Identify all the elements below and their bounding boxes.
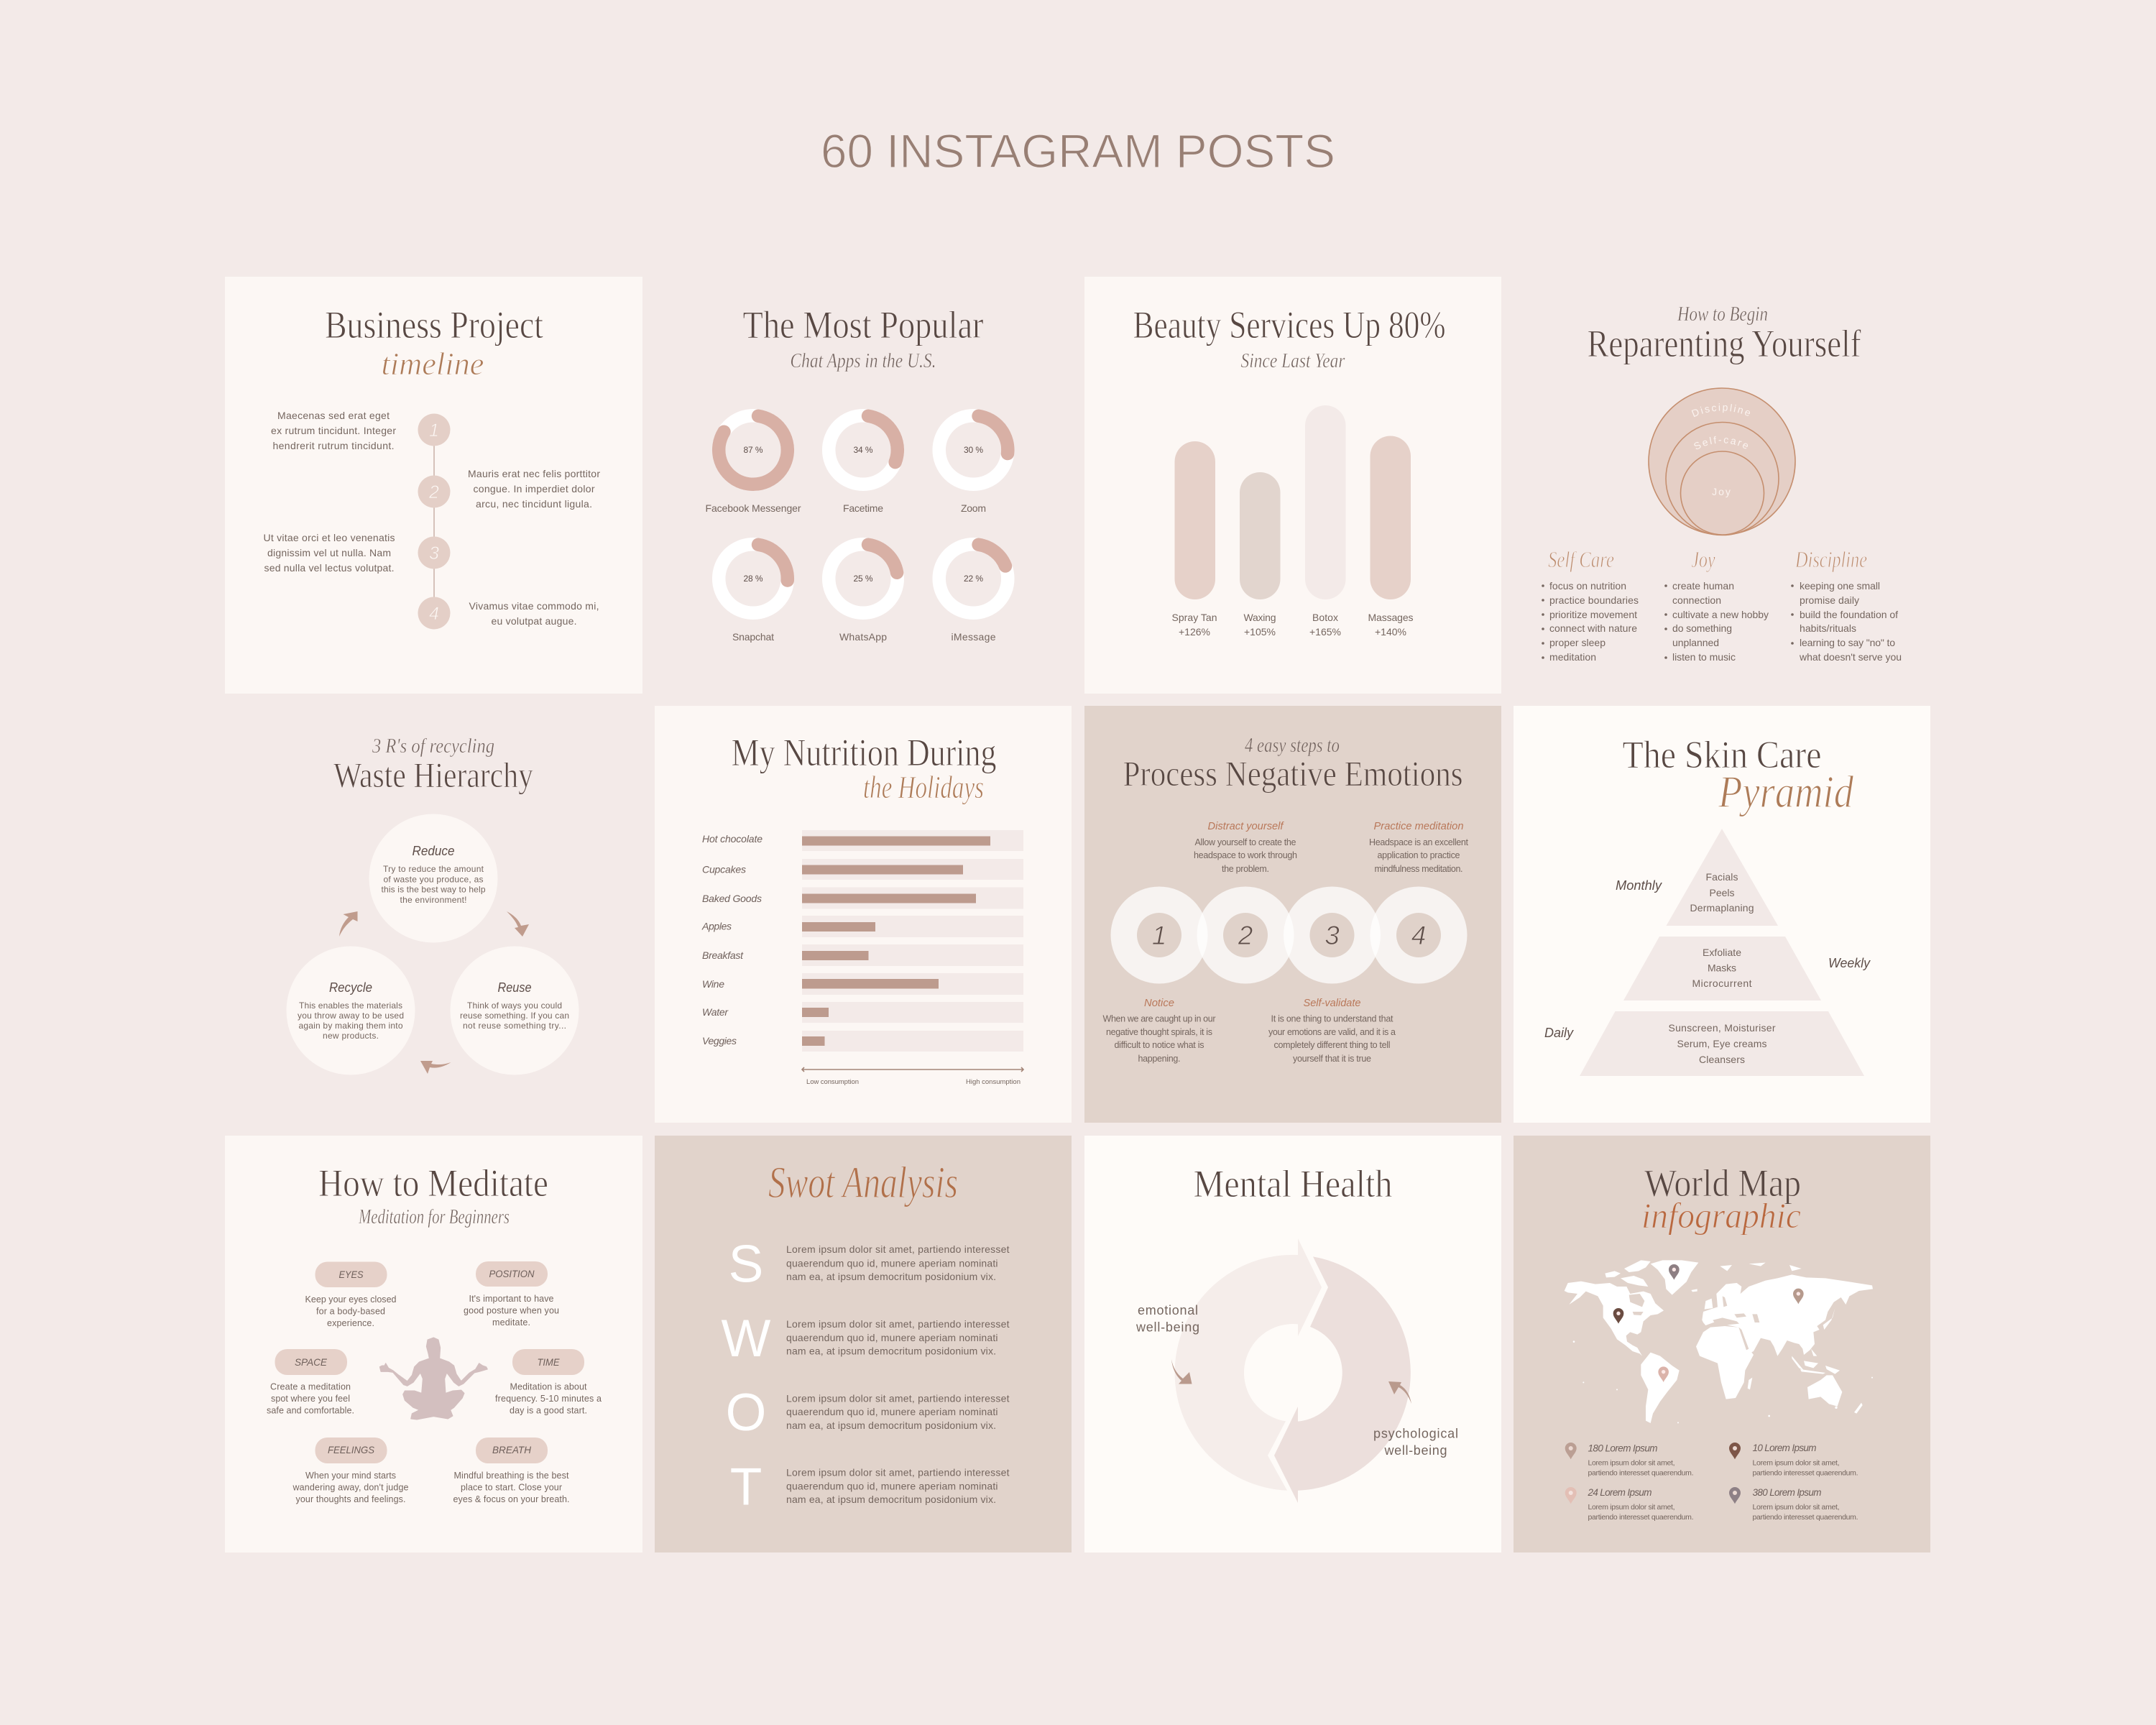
bar chart: consumption: Hot chocolate [702,833,763,845]
circle: reuse: Reuse [497,980,532,995]
panel: mental health [1084,1136,1501,1552]
pyramid tier: weekly: Weekly [1828,956,1871,970]
step: self-validate: your emotions are valid, and it is a [1268,1027,1396,1037]
swot row: W: W [722,1310,771,1368]
arrow: left [1171,1359,1192,1384]
swot row: O [726,1384,1010,1442]
circle: reduce: the environment! [400,895,467,905]
column: self care: connect with nature [1549,622,1637,634]
step: notice: difficult to notice what is [1114,1040,1204,1050]
step: distract yourself: headspace to work through [1194,850,1297,860]
timeline text 1: Maecenas sed erat eget [277,410,390,421]
bar: massages: +140% [1375,626,1406,638]
title: 60 INSTAGRAM POSTS [821,124,1335,178]
step: space: spot where you feel [271,1394,350,1404]
step: feelings: wandering away, don't judge [292,1482,409,1492]
step circles 1 to 4: 4 [1411,921,1426,950]
donut: facetime [824,411,902,514]
step: self-validate [1268,997,1396,1064]
nested circles diagram [1648,387,1796,536]
script heading: pyramid: Pyramid [1718,766,1854,817]
bar: spray tan: +126% [1179,626,1210,638]
step: time [495,1349,602,1416]
swot row: O: O [726,1384,766,1442]
column: discipline [1791,546,1902,663]
timeline text 2 [468,468,600,510]
step: notice: When we are caught up in our [1102,1013,1216,1024]
step: feelings [292,1438,409,1504]
swot row: T [730,1458,1010,1517]
step: practice meditation: Headspace is an excellent [1369,837,1469,847]
swot row: O: quaerendum quo id, munere aperiam nominati [786,1406,998,1417]
nested circles diagram: Joy [1712,486,1732,497]
timeline text 1: hendrerit rutrum tincidunt. [273,440,394,451]
timeline text 1: ex rutrum tincidunt. Integer [271,425,396,436]
column: joy: unplanned [1672,637,1719,648]
column: self care: prioritize movement [1549,609,1637,620]
step: feelings: FEELINGS [328,1444,375,1455]
legend: 10 lorem ipsum: partiendo interesset quaerendum. [1752,1469,1858,1478]
donut: facebook messenger: Facebook Messenger [706,502,801,514]
column: self care: meditation [1549,651,1596,663]
heading: beauty services: Beauty Services Up 80% [1133,303,1446,346]
nested circles diagram: Self-care [1694,436,1748,450]
swot row: S: S [729,1235,763,1294]
circle: recycle: new products. [323,1031,379,1041]
script heading: infographic: infographic [1641,1195,1801,1236]
panel: process negative emotions [1084,706,1501,1123]
heading: world map: World Map [1644,1162,1801,1205]
swot row: T: quaerendum quo id, munere aperiam nominati [786,1481,998,1492]
donut: facetime: Facetime [843,502,883,514]
step: breath: place to start. Close your [461,1482,562,1492]
subheading: since last year: Since Last Year [1240,350,1345,372]
column: self care: practice boundaries [1549,594,1639,606]
timeline text 3: dignissim vel ut nulla. Nam [267,547,391,558]
timeline text 2: Mauris erat nec felis porttitor [468,468,600,479]
column: discipline: learning to say "no" to [1800,637,1895,648]
pyramid tier: daily [1544,1011,1864,1076]
swot row: S: nam ea, at ipsum democritum posidonium vix. [786,1271,996,1282]
panel: world map [1514,1136,1930,1552]
label: psychological well-being: psychological [1373,1426,1458,1440]
timeline connector line and step circles: 2 [428,482,439,502]
panel: skin care pyramid [1514,706,1930,1123]
step: breath: Mindful breathing is the best [454,1471,569,1481]
subheading: meditation for beginners: Meditation for Beginners [358,1206,510,1228]
column: discipline: promise daily [1800,594,1859,606]
bar chart: consumption: Water [702,1006,729,1018]
panel: swot analysis [655,1136,1072,1552]
legend: 180 lorem ipsum [1565,1443,1693,1478]
donut: snapchat: 28 % [743,574,763,584]
swot row: W: Lorem ipsum dolor sit amet, partiendo interesset [786,1318,1010,1330]
bar: botox: +165% [1309,626,1341,638]
legend: 10 lorem ipsum: Lorem ipsum dolor sit amet, [1752,1459,1840,1468]
timeline connector line and step circles: 4 [429,604,439,624]
column: discipline: what doesn't serve you [1799,651,1902,663]
step: space [267,1349,354,1416]
donut: zoom: Zoom [961,502,986,514]
subheading: 4 easy steps: 4 easy steps to [1245,735,1340,757]
bar: botox [1305,405,1345,638]
legend: 380 lorem ipsum: 380 Lorem Ipsum [1752,1487,1821,1498]
donut: whatsapp [824,540,902,643]
step: practice meditation: Practice meditation [1374,820,1463,832]
column: discipline: Discipline [1795,546,1867,572]
bar chart: consumption: Veggies [702,1035,737,1046]
legend: 10 lorem ipsum: 10 Lorem Ipsum [1752,1443,1817,1453]
donut: zoom: 30 % [964,445,983,455]
pyramid tier: monthly: Monthly [1616,878,1662,893]
panel: beauty services [1084,277,1501,694]
heading: the skin care: The Skin Care [1623,733,1821,776]
step: position: meditate. [492,1317,530,1328]
circle: reduce: this is the best way to help [381,884,486,894]
step: distract yourself: Distract yourself [1207,820,1284,832]
axis: low to high consumption: High consumption [966,1078,1021,1086]
arrow: reduce to reuse [507,911,529,937]
step: distract yourself: the problem. [1222,864,1269,874]
axis: low to high consumption: Low consumption [806,1078,859,1086]
circle: reduce: Reduce [413,844,454,858]
arrow: reuse to recycle [420,1061,451,1074]
circle: recycle: again by making them into [299,1021,403,1031]
circle: reuse: reuse something. If you can [460,1011,569,1021]
legend: 24 lorem ipsum: partiendo interesset quaerendum. [1588,1513,1693,1522]
bar: waxing [1240,472,1281,638]
panel: most popular chat apps [655,277,1072,694]
timeline text 3: sed nulla vel lectus volutpat. [264,562,394,574]
column: joy: Joy [1692,546,1715,572]
swot row: W [722,1310,1010,1368]
step: position [464,1261,559,1328]
circle: recycle: Recycle [329,980,372,995]
step: distract yourself [1194,820,1297,874]
bar: waxing: Waxing [1243,612,1276,623]
circle: recycle: you throw away to be used [298,1011,404,1021]
heading: process negative emotions: Process Negative Emotions [1123,753,1463,794]
legend: 180 lorem ipsum: partiendo interesset quaerendum. [1588,1469,1693,1478]
panel: nutrition chart [655,706,1072,1123]
axis: low to high consumption [802,1067,1023,1086]
column: self care: proper sleep [1549,637,1606,648]
step: notice: happening. [1138,1054,1180,1064]
script heading: the holidays: the Holidays [863,770,984,805]
column: discipline: habits/rituals [1800,622,1856,634]
swot row: T: nam ea, at ipsum democritum posidonium vix. [786,1494,996,1505]
pyramid tier: monthly: Peels [1709,887,1735,898]
pyramid tier: monthly [1616,829,1778,926]
legend: 180 lorem ipsum: Lorem ipsum dolor sit amet, [1588,1459,1674,1468]
step: notice [1102,997,1216,1064]
step: position: good posture when you [464,1305,559,1315]
column: self care: Self Care [1548,546,1614,572]
timeline connector line and step circles [418,414,450,630]
bar: spray tan: Spray Tan [1171,612,1217,623]
timeline text 1 [271,410,396,451]
column: discipline: keeping one small [1800,580,1880,592]
column: joy [1664,546,1769,663]
pyramid tier: daily: Serum, Eye creams [1677,1038,1766,1049]
bar chart: consumption [701,830,1023,1052]
timeline text 4: Vivamus vitae commodo mi, [469,600,599,612]
column: self care: focus on nutrition [1549,580,1626,592]
swot row: O: Lorem ipsum dolor sit amet, partiendo interesset [786,1393,1010,1404]
arrow: recycle to reduce [339,911,358,937]
timeline text 3: Ut vitae orci et leo venenatis [263,532,395,543]
step: breath: eyes & focus on your breath. [453,1494,569,1504]
circle: reduce: Try to reduce the amount [383,864,484,874]
swot row: S: Lorem ipsum dolor sit amet, partiendo interesset [786,1243,1010,1255]
bar: massages: Massages [1368,612,1413,623]
donut: imessage: iMessage [952,631,996,643]
heading: reparenting yourself: Reparenting Yourself [1587,322,1861,365]
legend: 24 lorem ipsum: Lorem ipsum dolor sit amet, [1588,1503,1674,1512]
legend: 10 lorem ipsum [1729,1443,1858,1478]
timeline connector line and step circles: 1 [429,420,439,441]
pyramid tier: daily: Cleansers [1699,1054,1745,1065]
step: practice meditation [1369,820,1469,874]
step circles 1 to 4: 2 [1238,921,1253,950]
bar chart: consumption: Baked Goods [702,893,762,904]
heading: how to meditate: How to Meditate [318,1162,548,1205]
donut: zoom [934,411,1013,514]
step: space: safe and comfortable. [267,1406,354,1416]
column: joy: listen to music [1672,651,1736,663]
legend: 180 lorem ipsum: 180 Lorem Ipsum [1588,1443,1657,1453]
heading: business project: Business Project [325,303,543,346]
swot row: T: T [730,1458,762,1517]
legend: 24 lorem ipsum: 24 Lorem Ipsum [1587,1487,1651,1498]
circle: recycle [286,946,415,1075]
step: eyes: experience. [327,1318,374,1328]
label: emotional well-being: emotional [1138,1303,1198,1317]
step: time: frequency. 5-10 minutes a [495,1394,602,1404]
heading: the most popular: The Most Popular [743,303,984,346]
step: eyes: Keep your eyes closed [305,1294,397,1305]
pyramid tier: weekly: Microcurrent [1692,978,1752,989]
donut: snapchat [714,540,792,643]
label: psychological well-being [1373,1426,1458,1458]
step circles 1 to 4: 3 [1325,921,1340,950]
column: joy: connection [1672,594,1721,606]
donut: snapchat: Snapchat [732,631,774,643]
heading: mental health: Mental Health [1193,1162,1393,1205]
step: self-validate: completely different thing to tell [1273,1040,1390,1050]
swot row: S: quaerendum quo id, munere aperiam nominati [786,1258,998,1269]
swot row: W: nam ea, at ipsum democritum posidonium vix. [786,1346,996,1357]
step circles 1 to 4: 1 [1152,921,1166,950]
nested circles diagram: Discipline [1692,403,1750,417]
step: self-validate: Self-validate [1304,997,1361,1009]
column: joy: create human [1672,580,1734,592]
step: eyes [305,1262,397,1328]
bar: waxing: +105% [1244,626,1276,638]
bar chart: consumption: Breakfast [702,949,744,961]
arrow: right [1388,1381,1411,1404]
subheading: how to begin: How to Begin [1677,303,1768,326]
bar chart: consumption: Wine [702,978,724,990]
bar chart: consumption: Apples [701,920,732,932]
step: space: Create a meditation [270,1381,351,1392]
timeline text 4 [469,600,599,627]
heading: my nutrition during: My Nutrition During [732,731,996,774]
world map with pins [1565,1260,1873,1423]
legend: 24 lorem ipsum [1565,1487,1693,1522]
label: emotional well-being: well-being [1135,1320,1199,1334]
legend: 380 lorem ipsum: partiendo interesset quaerendum. [1752,1513,1858,1522]
column: discipline: build the foundation of [1800,609,1898,620]
circle: reuse [450,946,579,1075]
bar: spray tan [1171,441,1217,638]
step: time: Meditation is about [510,1381,587,1392]
label: emotional well-being [1135,1303,1199,1334]
step: self-validate: yourself that it is true [1293,1054,1371,1064]
step: distract yourself: Allow yourself to create the [1194,837,1296,847]
step: eyes: for a body-based [316,1307,385,1317]
step: space: SPACE [295,1356,328,1368]
pyramid tier: monthly: Dermaplaning [1690,902,1754,914]
script heading: timeline: timeline [381,346,484,382]
donut: facetime: 34 % [854,445,873,455]
step: feelings: When your mind starts [305,1471,396,1481]
timeline connector line and step circles: 3 [429,543,439,564]
step: feelings: your thoughts and feelings. [296,1494,405,1504]
step: position: It's important to have [469,1294,554,1304]
step: practice meditation: mindfulness meditation. [1374,864,1463,874]
donut: facebook messenger: 87 % [743,445,763,455]
bar: botox: Botox [1312,612,1338,623]
swot row: T: Lorem ipsum dolor sit amet, partiendo interesset [786,1466,1010,1478]
bar: massages [1368,436,1413,638]
step: position: POSITION [489,1268,535,1279]
circle: recycle: This enables the materials [299,1000,402,1011]
heading: waste hierarchy: Waste Hierarchy [333,755,533,795]
donut: whatsapp: WhatsApp [839,631,887,643]
swot row: O: nam ea, at ipsum democritum posidonium vix. [786,1420,996,1431]
timeline text 4: eu volutpat augue. [492,615,576,627]
label: psychological well-being: well-being [1384,1443,1447,1458]
pyramid tier: weekly [1623,937,1871,1000]
circle: reduce [369,814,497,943]
column: joy: cultivate a new hobby [1672,609,1769,620]
step circles 1 to 4 [1111,887,1468,983]
timeline text 2: arcu, nec tincidunt ligula. [476,498,592,510]
swot row: S [729,1235,1010,1294]
pyramid tier: monthly: Facials [1706,871,1738,883]
subheading: 3 Rs of recycling: 3 R's of recycling [372,735,494,758]
step: time: day is a good start. [510,1406,587,1416]
donut: facebook messenger [706,411,801,514]
cycle diagram [1175,1238,1411,1503]
column: self care [1542,546,1639,663]
step: time: TIME [538,1356,560,1368]
column: joy: do something [1672,622,1732,634]
pyramid tier: daily: Sunscreen, Moisturiser [1669,1022,1776,1034]
timeline text 3 [263,532,395,574]
legend: 380 lorem ipsum: Lorem ipsum dolor sit amet, [1752,1503,1840,1512]
circle: reuse: not reuse something try... [463,1021,566,1031]
pyramid tier: weekly: Masks [1708,962,1736,973]
donut: imessage [934,540,1013,643]
swot row: W: quaerendum quo id, munere aperiam nominati [786,1332,998,1343]
icon: meditating figure [379,1338,487,1420]
panel: business project timeline [225,277,642,694]
donut: imessage: 22 % [964,574,983,584]
panel: how to meditate [225,1136,642,1552]
step: eyes: EYES [339,1269,364,1280]
step: breath: BREATH [492,1444,532,1455]
step: self-validate: It is one thing to understand that [1271,1013,1393,1024]
bar chart: consumption: Cupcakes [702,864,746,875]
subheading: chat apps: Chat Apps in the U.S. [791,350,936,372]
pyramid tier: daily: Daily [1544,1026,1574,1040]
pyramid tier: weekly: Exfoliate [1703,947,1741,958]
legend: 380 lorem ipsum [1729,1487,1858,1522]
script heading: swot analysis: Swot Analysis [768,1159,958,1208]
step: breath [453,1438,569,1504]
step: practice meditation: application to practice [1377,850,1460,860]
circle: reduce: of waste you produce, as [384,874,483,884]
step: notice: Notice [1144,997,1174,1009]
donut: whatsapp: 25 % [854,574,873,584]
timeline text 2: congue. In imperdiet dolor [473,483,595,494]
panel: waste hierarchy [225,706,642,1123]
step: notice: negative thought spirals, it is [1106,1027,1212,1037]
circle: reuse: Think of ways you could [467,1000,562,1011]
panel: reparenting yourself [1542,303,1902,663]
